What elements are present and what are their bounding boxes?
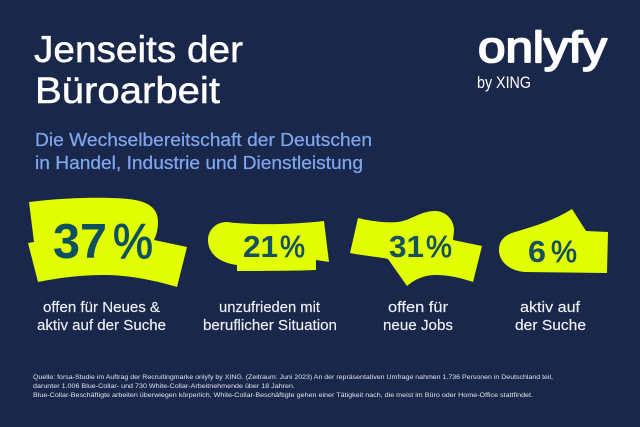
label: 31 percent: offen für	[388, 300, 448, 316]
logo: onlyfy by XING: by XING	[477, 73, 531, 92]
value: 37 percent	[53, 215, 153, 269]
label: 6 percent	[515, 300, 586, 334]
source footnote: darunter 1.006 Blue-Collar- und 730 White-Collar-Arbeitnehmende über 18 Jahren.	[33, 383, 295, 390]
value: 21 percent: %	[280, 229, 305, 264]
value: 31 percent: 31	[389, 229, 424, 264]
value: 21 percent: 21	[243, 229, 278, 264]
stat: 31 percent	[350, 211, 482, 334]
value: 6 percent: %	[551, 234, 577, 269]
value: 31 percent	[389, 229, 452, 264]
label: 37 percent: offen für Neues &	[43, 300, 160, 316]
label: 37 percent: aktiv auf der Suche	[37, 318, 166, 334]
label: 6 percent: aktiv auf	[520, 300, 581, 316]
label: 31 percent: neue Jobs	[383, 318, 453, 334]
value: 21 percent	[243, 229, 305, 264]
value: 37 percent: 37	[53, 215, 107, 269]
source footnote	[33, 374, 553, 399]
logo: onlyfy by XING: onlyfy	[478, 23, 607, 72]
value: 37 percent: %	[113, 215, 153, 269]
value: 31 percent: %	[426, 229, 452, 264]
label: 6 percent: der Suche	[515, 318, 586, 334]
shape: 21 percent highlight	[208, 221, 329, 271]
subtitle	[35, 130, 372, 173]
label: 21 percent: beruflicher Situation	[203, 318, 337, 334]
shape: 31 percent highlight	[350, 211, 482, 286]
shape: 6 percent highlight	[499, 209, 608, 273]
title: Büroarbeit	[35, 69, 221, 111]
value: 6 percent: 6	[528, 234, 546, 269]
title: Jenseits der	[34, 28, 243, 70]
label: 37 percent	[37, 300, 166, 334]
label: 31 percent	[383, 300, 453, 334]
source footnote: Quelle: forsa-Studie im Auftrag der Recruitingmarke onlyfy by XING. (Zeitraum: Juni 2023) An der repräsentativen Umfrage nahmen 1.736 Personen in Deutschland teil,	[33, 374, 553, 381]
stat: 6 percent	[499, 209, 608, 334]
source footnote: Blue-Collar-Beschäftigte arbeiten überwiegen körperlich. White-Collar-Beschäftigte gehen einer Tätigkeit nach, die meist im Büro oder Home-Office stattfindet.	[33, 392, 533, 399]
stat: 37 percent	[28, 198, 187, 334]
subtitle: Die Wechselbereitschaft der Deutschen	[35, 130, 372, 150]
logo: onlyfy by XING	[477, 23, 607, 92]
title	[34, 28, 243, 111]
label: 21 percent: unzufrieden mit	[219, 300, 320, 316]
subtitle: in Handel, Industrie und Dienstleistung	[35, 153, 363, 173]
stat: 21 percent	[203, 221, 337, 334]
value: 6 percent	[528, 234, 577, 269]
label: 21 percent	[203, 300, 337, 334]
shape: 37 percent highlight	[28, 198, 187, 287]
